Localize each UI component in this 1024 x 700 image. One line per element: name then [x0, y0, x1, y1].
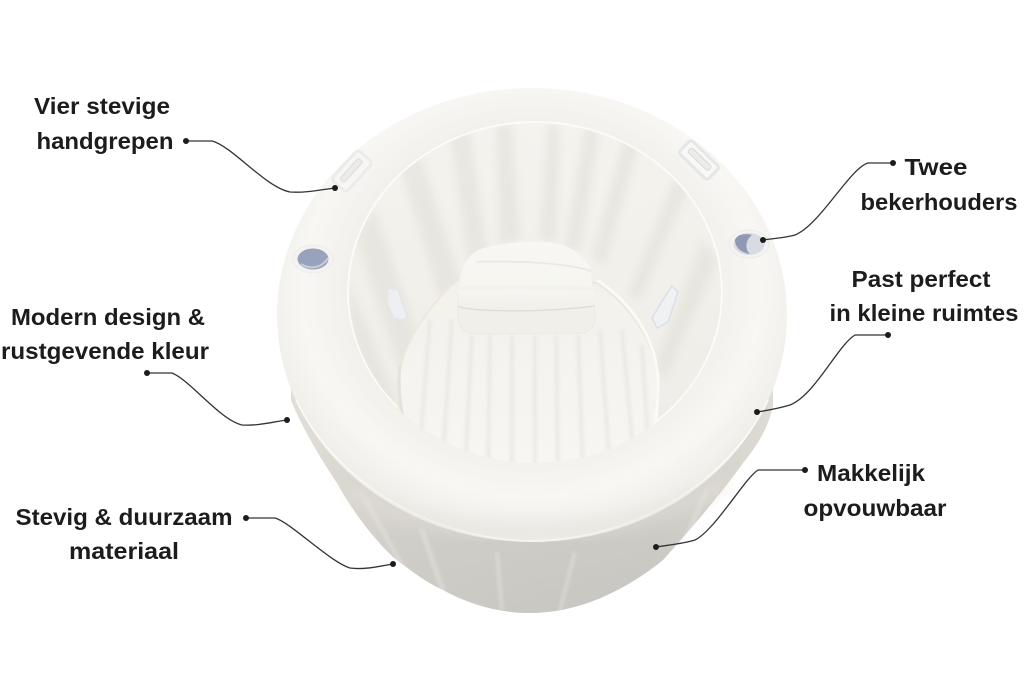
- label: makkelijk opvouwbaar: Makkelijk: [817, 460, 925, 486]
- label: bekerhouders: bekerhouders: [860, 189, 1018, 215]
- rim shadow seam: [347, 121, 723, 422]
- label: handgrepen: handgrepen: [36, 128, 174, 154]
- cup holder right: [729, 230, 769, 258]
- tub lower body: [291, 360, 773, 613]
- label: past perfect: Past perfect: [852, 266, 991, 292]
- label: modern design: rustgevende kleur: [1, 338, 209, 364]
- leader line: opvouwbaar: [653, 467, 808, 550]
- inner handle right: [652, 286, 678, 328]
- label: handgrepen: Vier stevige: [34, 93, 170, 119]
- label: stevig en duurzaam: [16, 504, 232, 564]
- inner wall: [347, 121, 723, 463]
- label: past perfect: [830, 266, 1018, 326]
- leader line: rustgevende kleur: [144, 370, 290, 425]
- label: modern design: Modern design &: [11, 304, 205, 330]
- leader line: duurzaam materiaal: [243, 515, 396, 569]
- top handle left: [331, 149, 373, 193]
- leader line: kleine ruimtes: [754, 332, 891, 415]
- label: bekerhouders: Twee: [904, 154, 968, 180]
- label: makkelijk opvouwbaar: opvouwbaar: [804, 495, 947, 521]
- leader line: bekerhouders: [760, 160, 896, 243]
- label: modern design: [1, 304, 209, 364]
- label: past perfect: in kleine ruimtes: [830, 300, 1018, 326]
- label: makkelijk opvouwbaar: [804, 460, 947, 521]
- inflatable top ring: [277, 88, 787, 542]
- leader line: handgrepen: [183, 138, 338, 192]
- tub illustration: [277, 88, 787, 613]
- cup holder left: [293, 245, 333, 273]
- inner handle left: [387, 288, 407, 320]
- label: stevig en duurzaam: materiaal: [69, 538, 179, 564]
- tub floor: [398, 280, 658, 470]
- label: handgrepen: [34, 93, 174, 154]
- headrest pillow: [458, 242, 595, 334]
- top handle right: [678, 140, 720, 180]
- label: bekerhouders: [860, 154, 1018, 215]
- label: stevig en duurzaam: Stevig & duurzaam: [16, 504, 232, 530]
